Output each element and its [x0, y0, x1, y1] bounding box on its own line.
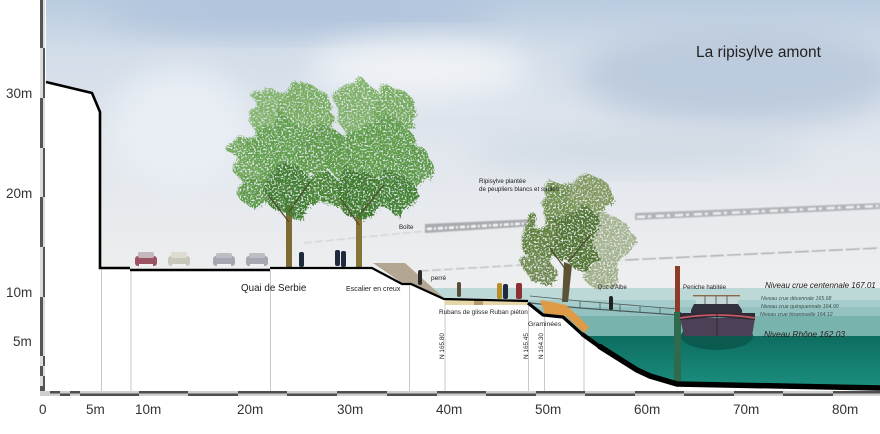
pedestrians: [299, 250, 613, 310]
inhabited barge: [680, 295, 755, 350]
section annotations: [241, 178, 727, 359]
title: La ripisylve amont: [696, 44, 822, 61]
section annotations: de peupliers blancs et saules: [479, 186, 559, 193]
section annotations: Boîte: [399, 224, 414, 231]
thin vertical section lines: [102, 269, 584, 392]
vertical scale labels: 5m: [13, 334, 32, 349]
flood level water bands: [430, 288, 880, 336]
sky background: [46, 0, 880, 290]
horizontal scale labels: 50m: [535, 402, 561, 417]
parked cars: [135, 252, 268, 266]
horizontal scale labels: 10m: [135, 402, 161, 417]
tree 3 riverside: [521, 176, 634, 302]
water level labels: Niveau Rhône 162.03: [764, 329, 845, 339]
water level labels: Niveau crue décennale 165.68: [761, 296, 831, 302]
horizontal scale labels: [39, 402, 858, 417]
vertical scale bar: [40, 0, 45, 396]
water level labels: Niveau crue centennale 167.01: [765, 281, 876, 290]
vertical scale labels: 30m: [6, 86, 32, 101]
paved walkway strip: [445, 300, 528, 305]
horizontal scale labels: 20m: [237, 402, 263, 417]
terrain outline: [46, 82, 880, 388]
section annotations: Peniche habitée: [683, 285, 727, 291]
grasses slope planting: [540, 300, 589, 333]
tree 2: [324, 84, 433, 268]
section annotations: Ripisylve plantée: [479, 178, 526, 185]
river Rhone water: [584, 336, 880, 386]
section annotations: Escalier en creux: [346, 285, 401, 293]
horizontal scale bar: [40, 391, 880, 396]
horizontal scale labels: 0: [39, 402, 47, 417]
water level labels: Niveau crue quinquennale 164.90: [761, 304, 839, 310]
vertical scale labels: 20m: [6, 186, 32, 201]
section annotations: N 164.30: [538, 333, 545, 359]
section annotations: Rubans de glisse Ruban piéton: [439, 309, 528, 316]
horizontal scale labels: 60m: [634, 402, 660, 417]
section annotations: Quai de Serbie: [241, 283, 307, 294]
vertical scale labels: [6, 86, 32, 349]
horizontal scale labels: 30m: [337, 402, 363, 417]
horizontal scale labels: 70m: [733, 402, 759, 417]
horizontal scale labels: 40m: [436, 402, 462, 417]
section annotations: N 165.45: [523, 333, 530, 359]
horizontal scale labels: 80m: [832, 402, 858, 417]
section annotations: Graminées: [528, 321, 562, 328]
vertical scale labels: 10m: [6, 285, 32, 300]
horizontal scale labels: 5m: [86, 402, 105, 417]
white ground section: [46, 82, 880, 392]
stair and perre stone: [373, 263, 444, 298]
section annotations: perré: [431, 275, 447, 282]
water level labels: [760, 281, 876, 339]
pedestrian footbridge: [530, 296, 678, 315]
bollard post of the Duc d'Albe: [674, 266, 681, 384]
distant bridge bands: [304, 203, 880, 271]
section annotations: Duc d'Albe: [598, 285, 627, 291]
tree 1: [231, 83, 347, 268]
section annotations: N 165.80: [439, 333, 446, 359]
water level labels: Niveau crue bisannuelle 164.12: [760, 312, 833, 318]
